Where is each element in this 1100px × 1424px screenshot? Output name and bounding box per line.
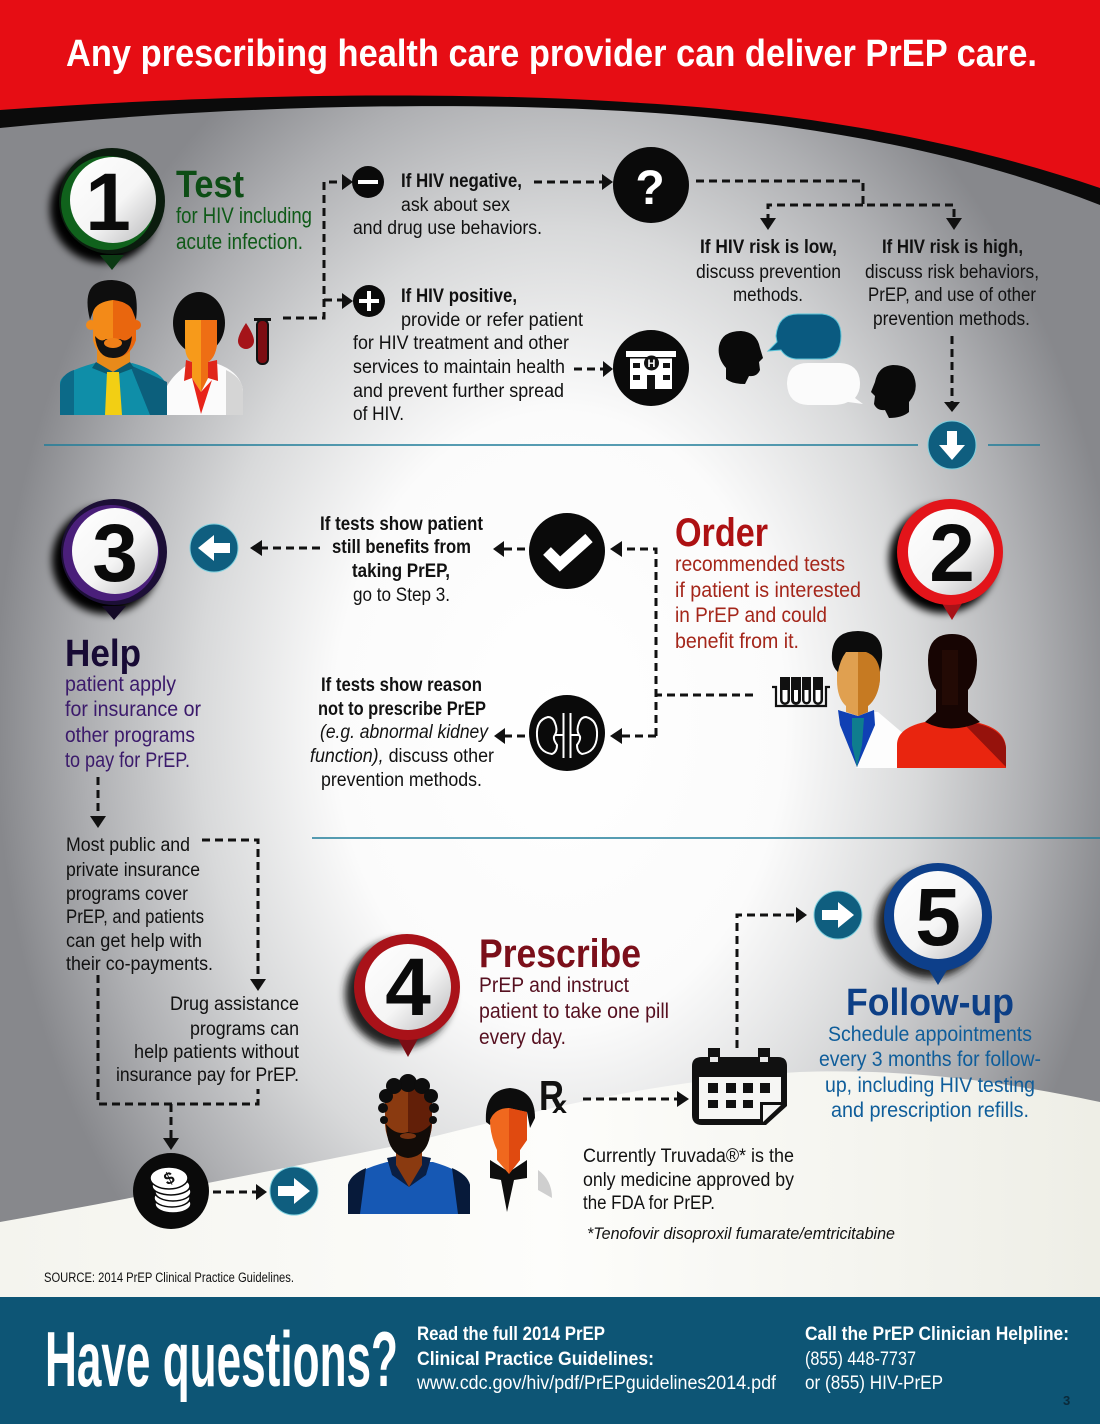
icon: teal down arrow <box>928 421 976 469</box>
connector: calendar to follow-up <box>737 907 807 1048</box>
footer helpline text: (855) 448-7737 <box>805 1349 916 1370</box>
text: drug assistance: Drug assistance <box>170 994 299 1015</box>
text: insurance coverage: can get help with <box>66 931 202 952</box>
connector: order to results <box>610 541 753 744</box>
arrow: negative to question <box>534 174 613 190</box>
step 3 heading: Help: other programs <box>65 724 195 747</box>
badge 5 <box>876 863 992 985</box>
text: tests show benefit <box>320 514 484 606</box>
icon: teal right arrow to step 5 <box>814 891 862 939</box>
text: HIV negative <box>353 171 542 239</box>
footer helpline text: or (855) HIV-PrEP <box>805 1373 943 1394</box>
step 3 heading: Help: to pay for PrEP. <box>65 749 190 772</box>
footer guidelines text: www.cdc.gov/hiv/pdf/PrEPguidelines2014.pdf <box>416 1373 777 1394</box>
text: tests show benefit: go to Step 3. <box>353 585 450 606</box>
footer guidelines text <box>416 1324 777 1394</box>
step 3 heading: Help: patient apply <box>65 673 176 696</box>
footer helpline text: Call the PrEP Clinician Helpline: <box>805 1324 1069 1345</box>
arrow: help to insurance <box>90 777 106 828</box>
text: high risk: discuss risk behaviors, <box>865 262 1039 283</box>
badge 2: 2 <box>929 508 975 599</box>
text: low risk: discuss prevention <box>696 262 841 283</box>
footer guidelines text: Read the full 2014 PrEP <box>417 1324 605 1345</box>
arrow: text to step 3 <box>250 540 320 556</box>
people: doctor man and woman <box>60 280 243 415</box>
step 2 heading: Order <box>675 511 861 653</box>
footer heading: Have questions? <box>45 1315 398 1403</box>
icon: coins: $ <box>161 1168 178 1189</box>
text: low risk: If HIV risk is low, <box>700 237 837 258</box>
text: drug assistance <box>116 994 300 1086</box>
footer panel <box>0 1297 1100 1424</box>
step 4 heading: Prescribe: PrEP and instruct <box>479 974 629 997</box>
page number: 3 <box>1063 1393 1070 1408</box>
text: HIV negative: and drug use behaviors. <box>353 218 542 239</box>
text: Truvada note: Currently Truvada®* is the <box>583 1146 794 1167</box>
text: high risk: PrEP, and use of other <box>868 285 1037 306</box>
text: low risk <box>696 237 841 306</box>
text: insurance coverage: Most public and <box>66 835 190 856</box>
step 2 heading: Order: recommended tests <box>675 553 845 576</box>
badge 3 <box>52 499 167 620</box>
step 5 heading: Follow-up: up, including HIV testing <box>825 1074 1035 1097</box>
people: doctor and patient <box>832 631 1006 768</box>
text: insurance coverage <box>66 835 213 975</box>
text: insurance coverage: programs cover <box>66 884 189 905</box>
text: tests show reason not to prescribe: (e.g. abnormal kidney <box>320 722 489 743</box>
text: HIV negative: ask about sex <box>401 195 510 216</box>
step 1 heading: Test <box>176 164 312 254</box>
arrow: positive to hospital <box>574 361 613 377</box>
text: tests show reason not to prescribe: function), discuss other <box>310 746 495 767</box>
text: HIV positive <box>353 286 584 425</box>
step 3 heading: Help: Help <box>65 633 141 675</box>
footer helpline text <box>805 1324 1069 1394</box>
arrow: kidney to text <box>494 728 525 744</box>
icon: test tube rack <box>772 677 830 706</box>
step 5 heading: Follow-up: and prescription refills. <box>831 1099 1029 1122</box>
step 2 heading: Order: Order <box>675 511 768 555</box>
text: tests show reason not to prescribe: If tests show reason <box>321 675 482 696</box>
text: HIV positive: of HIV. <box>353 404 404 425</box>
text: Truvada note: only medicine approved by <box>583 1170 794 1191</box>
step 2 heading: Order: benefit from it. <box>675 630 799 653</box>
header banner <box>0 0 1100 205</box>
text: low risk: methods. <box>733 285 803 306</box>
icon: positive <box>353 285 385 317</box>
text: tests show benefit: still benefits from <box>332 537 471 558</box>
step 3 heading: Help: for insurance or <box>65 698 201 721</box>
icon: question mark: ? <box>635 162 665 215</box>
icon: calendar <box>692 1048 787 1125</box>
badge 4: 4 <box>385 942 431 1033</box>
step 5 heading: Follow-up: Follow-up <box>846 982 1014 1024</box>
badge 1 <box>50 148 165 270</box>
badge 5: 5 <box>915 872 961 963</box>
badge 4 <box>345 934 460 1057</box>
step 5 heading: Follow-up <box>819 982 1041 1122</box>
text: HIV positive: If HIV positive, <box>401 286 517 307</box>
badge 1: 1 <box>85 157 131 248</box>
text: tests show benefit: If tests show patient <box>320 514 484 535</box>
step 5 heading: Follow-up: every 3 months for follow- <box>819 1048 1041 1071</box>
text: drug assistance: help patients without <box>134 1042 300 1063</box>
step 1 heading: Test: acute infection. <box>176 229 303 254</box>
text: tests show benefit: taking PrEP, <box>352 561 450 582</box>
text: high risk: prevention methods. <box>873 309 1030 330</box>
text: tests show reason not to prescribe: not to prescribe PrEP <box>318 699 486 720</box>
icon: kidneys <box>529 695 605 771</box>
icon: hospital: H <box>648 358 656 370</box>
text: drug assistance: insurance pay for PrEP. <box>116 1065 299 1086</box>
text: Truvada note <box>583 1146 794 1214</box>
icon: teal right arrow <box>270 1167 318 1215</box>
step 4 heading: Prescribe: every day. <box>479 1026 566 1049</box>
icon: teal left arrow <box>190 524 238 572</box>
text: tests show reason not to prescribe <box>310 675 495 791</box>
footer guidelines text: Clinical Practice Guidelines: <box>417 1349 654 1370</box>
icon: two heads talking <box>719 314 916 418</box>
text: insurance coverage: private insurance <box>66 860 200 881</box>
text: insurance coverage: their co-payments. <box>66 954 213 975</box>
arrow: high risk to step 2 <box>944 336 960 412</box>
badge 3: 3 <box>92 508 138 599</box>
text: Truvada note: the FDA for PrEP. <box>583 1193 715 1214</box>
text: HIV positive: provide or refer patient <box>401 310 584 331</box>
badge 2 <box>889 499 1003 620</box>
step 1 heading: Test: Test <box>176 164 244 206</box>
step 5 heading: Follow-up: Schedule appointments <box>828 1023 1032 1046</box>
people: patient and pharmacist <box>348 1074 552 1214</box>
step 1 heading: Test: for HIV including <box>176 203 312 228</box>
arrow: check to text <box>493 541 525 557</box>
text: tests show reason not to prescribe: prevention methods. <box>321 770 482 791</box>
text: high risk: If HIV risk is high, <box>882 237 1023 258</box>
text: high risk <box>865 237 1039 330</box>
icon: Rx: R <box>539 1072 564 1119</box>
section dividers <box>44 445 1100 838</box>
icon: coins <box>133 1153 209 1229</box>
connector: question to risk branches <box>696 181 962 230</box>
connector: test to results <box>283 174 353 318</box>
step 3 heading: Help <box>65 633 201 772</box>
icon: Rx: x <box>552 1092 567 1118</box>
step 2 heading: Order: if patient is interested <box>675 579 861 602</box>
step 4 heading: Prescribe <box>479 932 669 1049</box>
icon: question mark <box>613 147 689 223</box>
icon: check mark <box>529 513 605 589</box>
text: insurance coverage: PrEP, and patients <box>66 907 204 928</box>
text: HIV positive: and prevent further spread <box>353 381 564 402</box>
text: HIV negative: If HIV negative, <box>401 171 522 192</box>
step 4 heading: Prescribe: Prescribe <box>479 932 641 976</box>
icon: blood drop and test tube <box>238 318 271 364</box>
text: HIV positive: services to maintain health <box>353 357 565 378</box>
text: drug assistance: programs can <box>190 1019 299 1040</box>
arrow: Rx to calendar <box>583 1091 689 1107</box>
text: HIV positive: for HIV treatment and other <box>353 333 570 354</box>
arrow: coins to step 4 <box>213 1184 267 1200</box>
icon: hospital <box>613 330 689 406</box>
step 4 heading: Prescribe: patient to take one pill <box>479 1000 669 1023</box>
step 2 heading: Order: in PrEP and could <box>675 604 827 627</box>
connector: insurance to coins <box>98 840 266 1150</box>
icon: negative <box>352 166 384 198</box>
footnote: *Tenofovir disoproxil fumarate/emtricitabine <box>587 1224 895 1243</box>
source: SOURCE: 2014 PrEP Clinical Practice Guidelines. <box>44 1270 294 1285</box>
